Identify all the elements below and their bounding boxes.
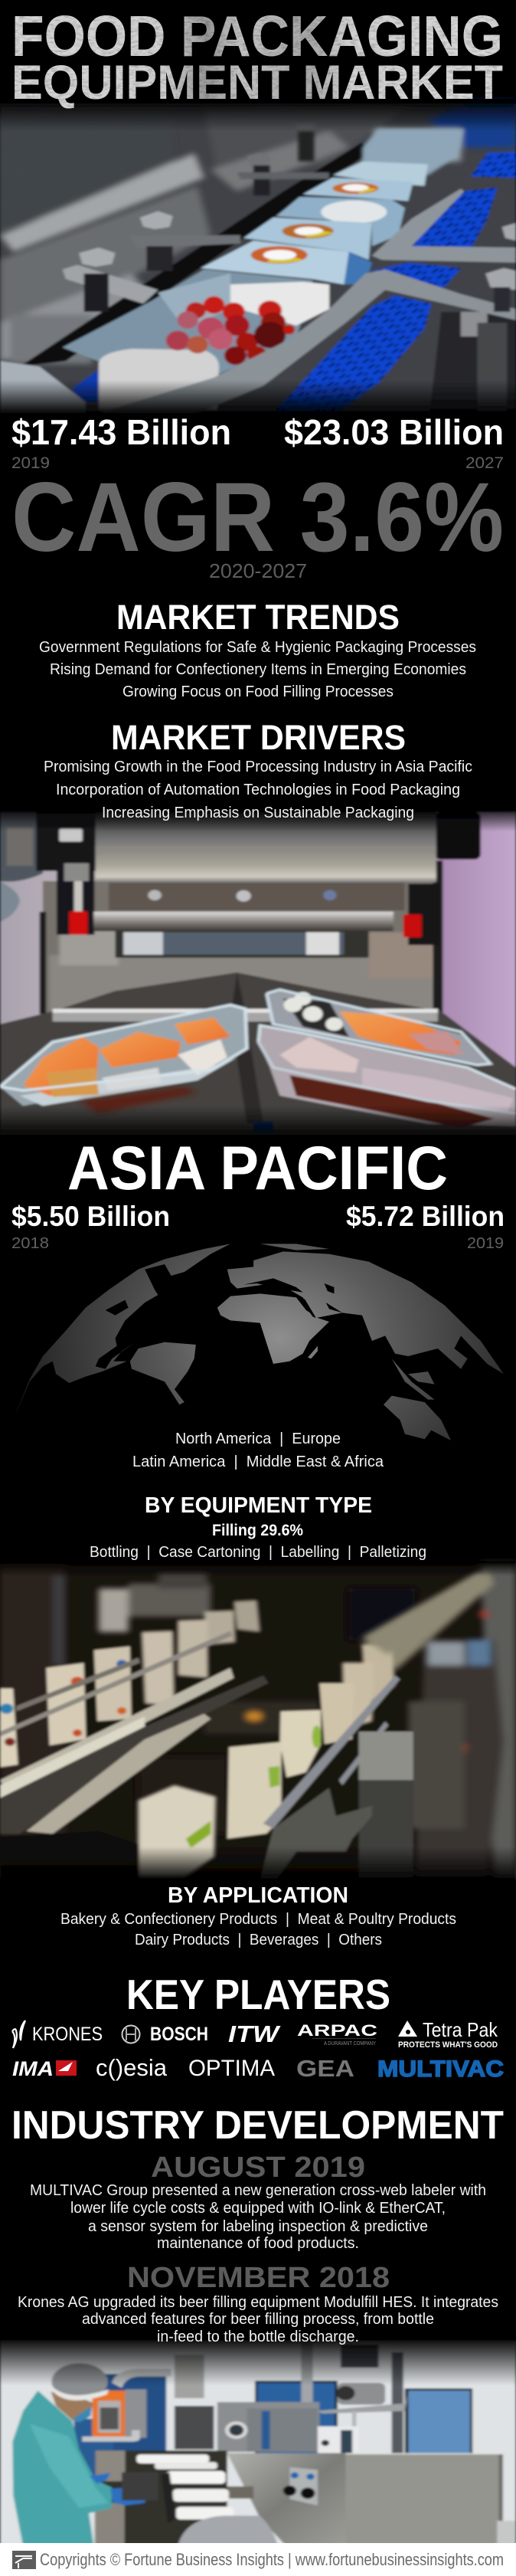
panel: by equipment type: BY EQUIPMENT TYPE — [145, 1493, 372, 1518]
panel: market drivers: Promising Growth in the Food Processing Industry in Asia Pacific — [44, 759, 472, 775]
footer — [0, 2543, 516, 2576]
panel: August 2019 development — [30, 2152, 486, 2252]
panel: by equipment type: Filling 29.6% — [212, 1522, 303, 1539]
panel: regional figures: 2018 — [11, 1235, 49, 1252]
market size figures: $17.43 Billion — [11, 412, 231, 452]
logo: Arpac — [297, 2022, 377, 2047]
panel: regional figures: $5.50 Billion — [11, 1201, 170, 1232]
panel: regional figures: 2019 — [467, 1235, 504, 1252]
logo: Arpac: A DURAVANT COMPANY — [324, 2041, 376, 2047]
CAGR: 2020-2027 — [209, 559, 307, 582]
panel: November 2018 development — [18, 2262, 498, 2328]
heading: industry development: INDUSTRY DEVELOPMENT — [11, 2103, 504, 2148]
panel: market trends: Government Regulations for Safe & Hygienic Packaging Processes — [39, 639, 476, 656]
logo: Krones: KRONES — [32, 2024, 103, 2045]
panel: market drivers — [44, 718, 472, 798]
heading: key players: KEY PLAYERS — [126, 1971, 390, 2018]
market size figures: 2027 — [465, 454, 504, 472]
panel: by application: BY APPLICATION — [168, 1883, 348, 1908]
panel: by equipment type — [145, 1493, 372, 1539]
logo: Tetra Pak: PROTECTS WHAT'S GOOD — [398, 2040, 498, 2050]
market size figures: $23.03 Billion — [284, 412, 504, 452]
photo: conveyor with food trays — [0, 99, 516, 432]
panel: market drivers: MARKET DRIVERS — [111, 718, 406, 757]
panel: November 2018 development: advanced features for beer filling process, from bottle — [82, 2311, 434, 2328]
logo: Krones — [12, 2020, 103, 2048]
panel: August 2019 development: a sensor system for labeling inspection & predictive — [88, 2218, 428, 2235]
photo: tray sealing machine with sushi — [0, 806, 516, 1138]
logo: Tetra Pak — [398, 2018, 498, 2050]
panel: November 2018 development: Krones AG upgraded its beer filling equipment Modulfill HES. It integrates — [18, 2294, 498, 2311]
title — [11, 4, 503, 110]
panel: market trends: MARKET TRENDS — [116, 598, 400, 637]
panel: August 2019 development: AUGUST 2019 — [151, 2152, 365, 2184]
panel: market drivers: Incorporation of Automation Technologies in Food Packaging — [56, 782, 460, 798]
logo: Bosch: BOSCH — [150, 2024, 208, 2045]
logo: GEA: GEA — [296, 2055, 354, 2082]
logo: Tetra Pak: Tetra Pak — [423, 2018, 498, 2041]
other regions list — [132, 1431, 384, 1470]
market size figures — [11, 412, 504, 472]
market size figures: 2019 — [11, 454, 50, 472]
other regions list: North America | Europe — [175, 1431, 341, 1447]
logo: Multivac: MULTIVAC — [377, 2057, 504, 2082]
logo: ITW: ITW — [228, 2020, 281, 2047]
panel: market trends: Rising Demand for Confectionery Items in Emerging Economies — [50, 661, 466, 678]
panel: market trends — [39, 598, 476, 700]
heading: Asia Pacific: ASIA PACIFIC — [67, 1134, 448, 1203]
panel: August 2019 development: lower life cycle costs & equipped with IO-link & EtherCAT, — [70, 2200, 446, 2217]
photo: technician at packaging machine — [0, 2329, 516, 2546]
title: EQUIPMENT MARKET — [11, 56, 503, 110]
panel: August 2019 development: maintenance of food products. — [157, 2235, 359, 2252]
world globe map — [13, 1244, 504, 1440]
panel: by application: Dairy Products | Beverages | Others — [135, 1932, 382, 1948]
panel: regional figures — [11, 1201, 505, 1252]
panel: market trends: Growing Focus on Food Filling Processes — [122, 683, 394, 700]
panel: by application — [0, 1880, 516, 2109]
development line over photo: in-feed to the bottle discharge. — [157, 2329, 359, 2345]
logo: IMA: IMA — [12, 2057, 54, 2080]
logo: Bosch — [122, 2024, 208, 2045]
logo: Coesia: c()esia — [96, 2054, 168, 2081]
other regions list: Latin America | Middle East & Africa — [132, 1454, 384, 1470]
panel: November 2018 development: NOVEMBER 2018 — [127, 2262, 390, 2294]
panel: August 2019 development: MULTIVAC Group presented a new generation cross-web labeler with — [30, 2182, 486, 2199]
photo: cartons on conveyor — [0, 1561, 516, 1881]
panel: regional figures: $5.72 Billion — [346, 1201, 505, 1232]
equipment type list: Bottling | Case Cartoning | Labelling | Palletizing — [90, 1544, 426, 1561]
company logos — [12, 2018, 504, 2082]
market driver line over photo: Increasing Emphasis on Sustainable Packaging — [102, 805, 414, 821]
logo: Arpac: ARPAC — [297, 2022, 377, 2040]
panel: by application: Bakery & Confectionery Products | Meat & Poultry Products — [60, 1911, 456, 1928]
icon: Fortune Business Insights logo — [12, 2551, 36, 2569]
logo: IMA — [12, 2057, 77, 2080]
logo: Optima: OPTIMA — [188, 2056, 275, 2081]
